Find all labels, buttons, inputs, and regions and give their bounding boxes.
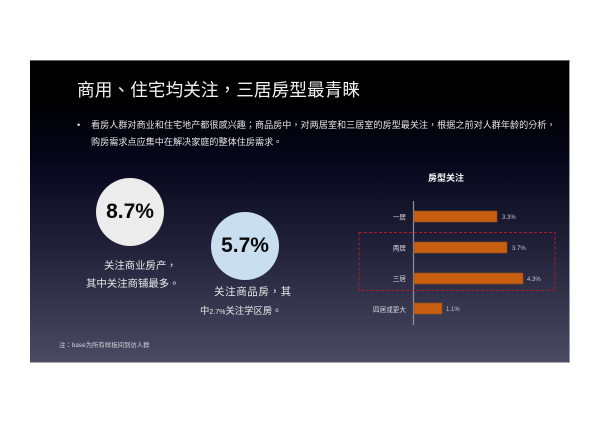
bar chart: room types: 房型关注 [428,172,464,183]
bar chart: room types: 一居 [393,214,406,222]
stat circle: 8.7%: 8.7% [106,200,154,223]
panel: dark slide [30,60,570,363]
text: commercial property: 关注商业房产， [104,261,177,272]
bar chart: room types: 1.1% [446,307,460,313]
bullet text block: • [77,120,80,130]
bar chart: room types: 4.3% [527,277,541,283]
bar chart: room types: 三居 [393,275,406,283]
bar chart: room types [358,172,556,325]
text: residential property: 中2.7%关注学区房。 [200,305,282,316]
bullet text block [77,120,556,147]
text: residential property: 关注商品房，其 [214,286,292,298]
text: residential property [200,286,292,316]
bar chart: room types: 3.3% [502,215,516,221]
text: commercial property [86,260,180,290]
stat circle: 5.7%: 5.7% [221,234,269,257]
bar chart: room types: 四居或更大 [373,305,406,314]
bar chart: room types: 3.7% [512,246,526,252]
stat circle: 5.7% [211,212,279,280]
bullet text block: 看房人群对商业和住宅地产都很感兴趣；商品房中，对两居室和三居室的房型最关注，根据之前对人群年龄的分析， [91,120,556,130]
title: 商用、住宅均关注，三居房型最青睐 [77,80,360,100]
text: commercial property: 其中关注商铺最多。 [86,279,180,290]
bar chart: room types: 两居 [393,244,406,252]
bullet text block: 购房需求点应集中在解决家庭的整体住房需求。 [91,137,282,147]
stat circle: 8.7% [96,178,164,246]
footnote: 注：base为所有样板间到访人群 [59,342,150,349]
